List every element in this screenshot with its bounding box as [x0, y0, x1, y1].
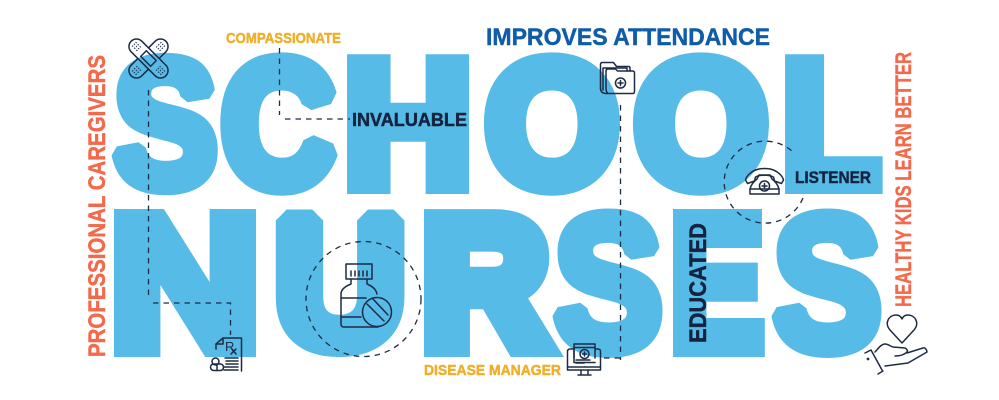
word: NURSES [110, 177, 881, 389]
icon: telephone [746, 168, 784, 194]
icon: heart in hand [865, 315, 927, 374]
word: NURSES: E [670, 177, 764, 389]
label: improves attendance: IMPROVES ATTENDANCE [486, 24, 770, 51]
word: SCHOOL: S [113, 24, 217, 224]
label: invaluable: INVALUABLE [352, 110, 467, 130]
word: SCHOOL: H [344, 25, 472, 223]
word: NURSES: R [423, 180, 548, 385]
icon: computer monitor [568, 344, 600, 375]
word: NURSES: S [773, 178, 881, 389]
icon: prescription [210, 338, 242, 371]
word: NURSES: S [554, 178, 662, 389]
icon: bandage [126, 36, 171, 81]
word: NURSES: N [110, 178, 260, 389]
label: educated: EDUCATED [685, 223, 712, 343]
word: SCHOOL [113, 24, 879, 224]
dashed circle: medicine [306, 242, 421, 356]
label: professional caregivers: PROFESSIONAL CAREGIVERS [84, 55, 111, 357]
dashed connector: folder to monitor [600, 105, 620, 360]
label: disease manager: DISEASE MANAGER [424, 363, 561, 379]
dashed connector: compassionate to invaluable [280, 48, 350, 119]
label: listener: LISTENER [795, 169, 871, 187]
word: SCHOOL: C [222, 26, 335, 223]
icon: medical folder [600, 62, 634, 94]
label: compassionate: COMPASSIONATE [226, 31, 341, 47]
dashed circle: telephone [724, 141, 803, 223]
word: SCHOOL: O [486, 25, 618, 223]
icon: prescription: R [225, 339, 234, 354]
word: NURSES: U [276, 181, 404, 383]
word: SCHOOL: L [782, 25, 879, 223]
word: SCHOOL: O [635, 25, 767, 223]
dashed connector: bandage to prescription [148, 90, 230, 335]
icon: medicine bottle [341, 264, 392, 327]
